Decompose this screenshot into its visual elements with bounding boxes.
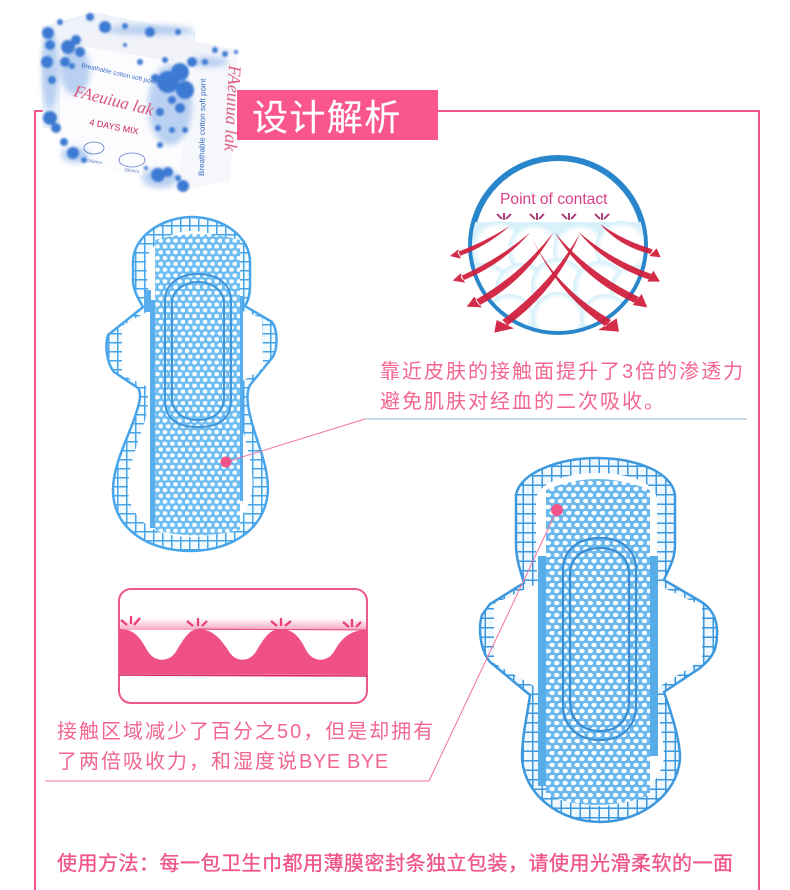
text: contact area — [57, 721, 435, 773]
label: point of contact: Point of contact — [500, 191, 608, 208]
absorbent channel — [563, 538, 636, 740]
product package: Breathable cotton soft point — [197, 78, 208, 176]
cross-section diagram — [119, 589, 367, 703]
text: usage: 使用方法：每一包卫生巾都用薄膜密封条独立包装，请使用光滑柔软的一面 — [57, 853, 734, 875]
product package: 280mm — [124, 167, 140, 174]
text: contact area: 了两倍吸收力，和湿度说BYE BYE — [57, 751, 389, 773]
pad diagram: left — [106, 217, 276, 551]
product package: 4 DAYS MIX — [89, 117, 139, 136]
text: contact area: 接触区域减少了百分之50，但是却拥有 — [57, 721, 435, 743]
absorbent channel — [165, 274, 231, 427]
red arrows — [450, 224, 661, 333]
text: skin contact: 靠近皮肤的接触面提升了3倍的渗透力 — [380, 361, 745, 383]
contact point diagram — [450, 158, 661, 344]
product package: FAeuiua lak — [71, 81, 156, 120]
pad diagram: right — [480, 458, 717, 822]
leader line: top text — [220, 419, 747, 468]
title text: 设计解析 — [252, 97, 402, 138]
text: skin contact — [380, 361, 745, 413]
product package: FAeuiua lak — [220, 64, 245, 153]
contact sprouts — [497, 213, 609, 220]
text: skin contact: 避免肌肤对经血的二次吸收。 — [380, 391, 666, 413]
title banner — [237, 90, 438, 140]
leader line: lower text — [45, 504, 563, 781]
product package: 240mm — [87, 158, 103, 165]
product package: Breathable cotton soft point — [81, 62, 158, 87]
sprouts on crests — [121, 616, 361, 627]
product package — [41, 13, 245, 192]
